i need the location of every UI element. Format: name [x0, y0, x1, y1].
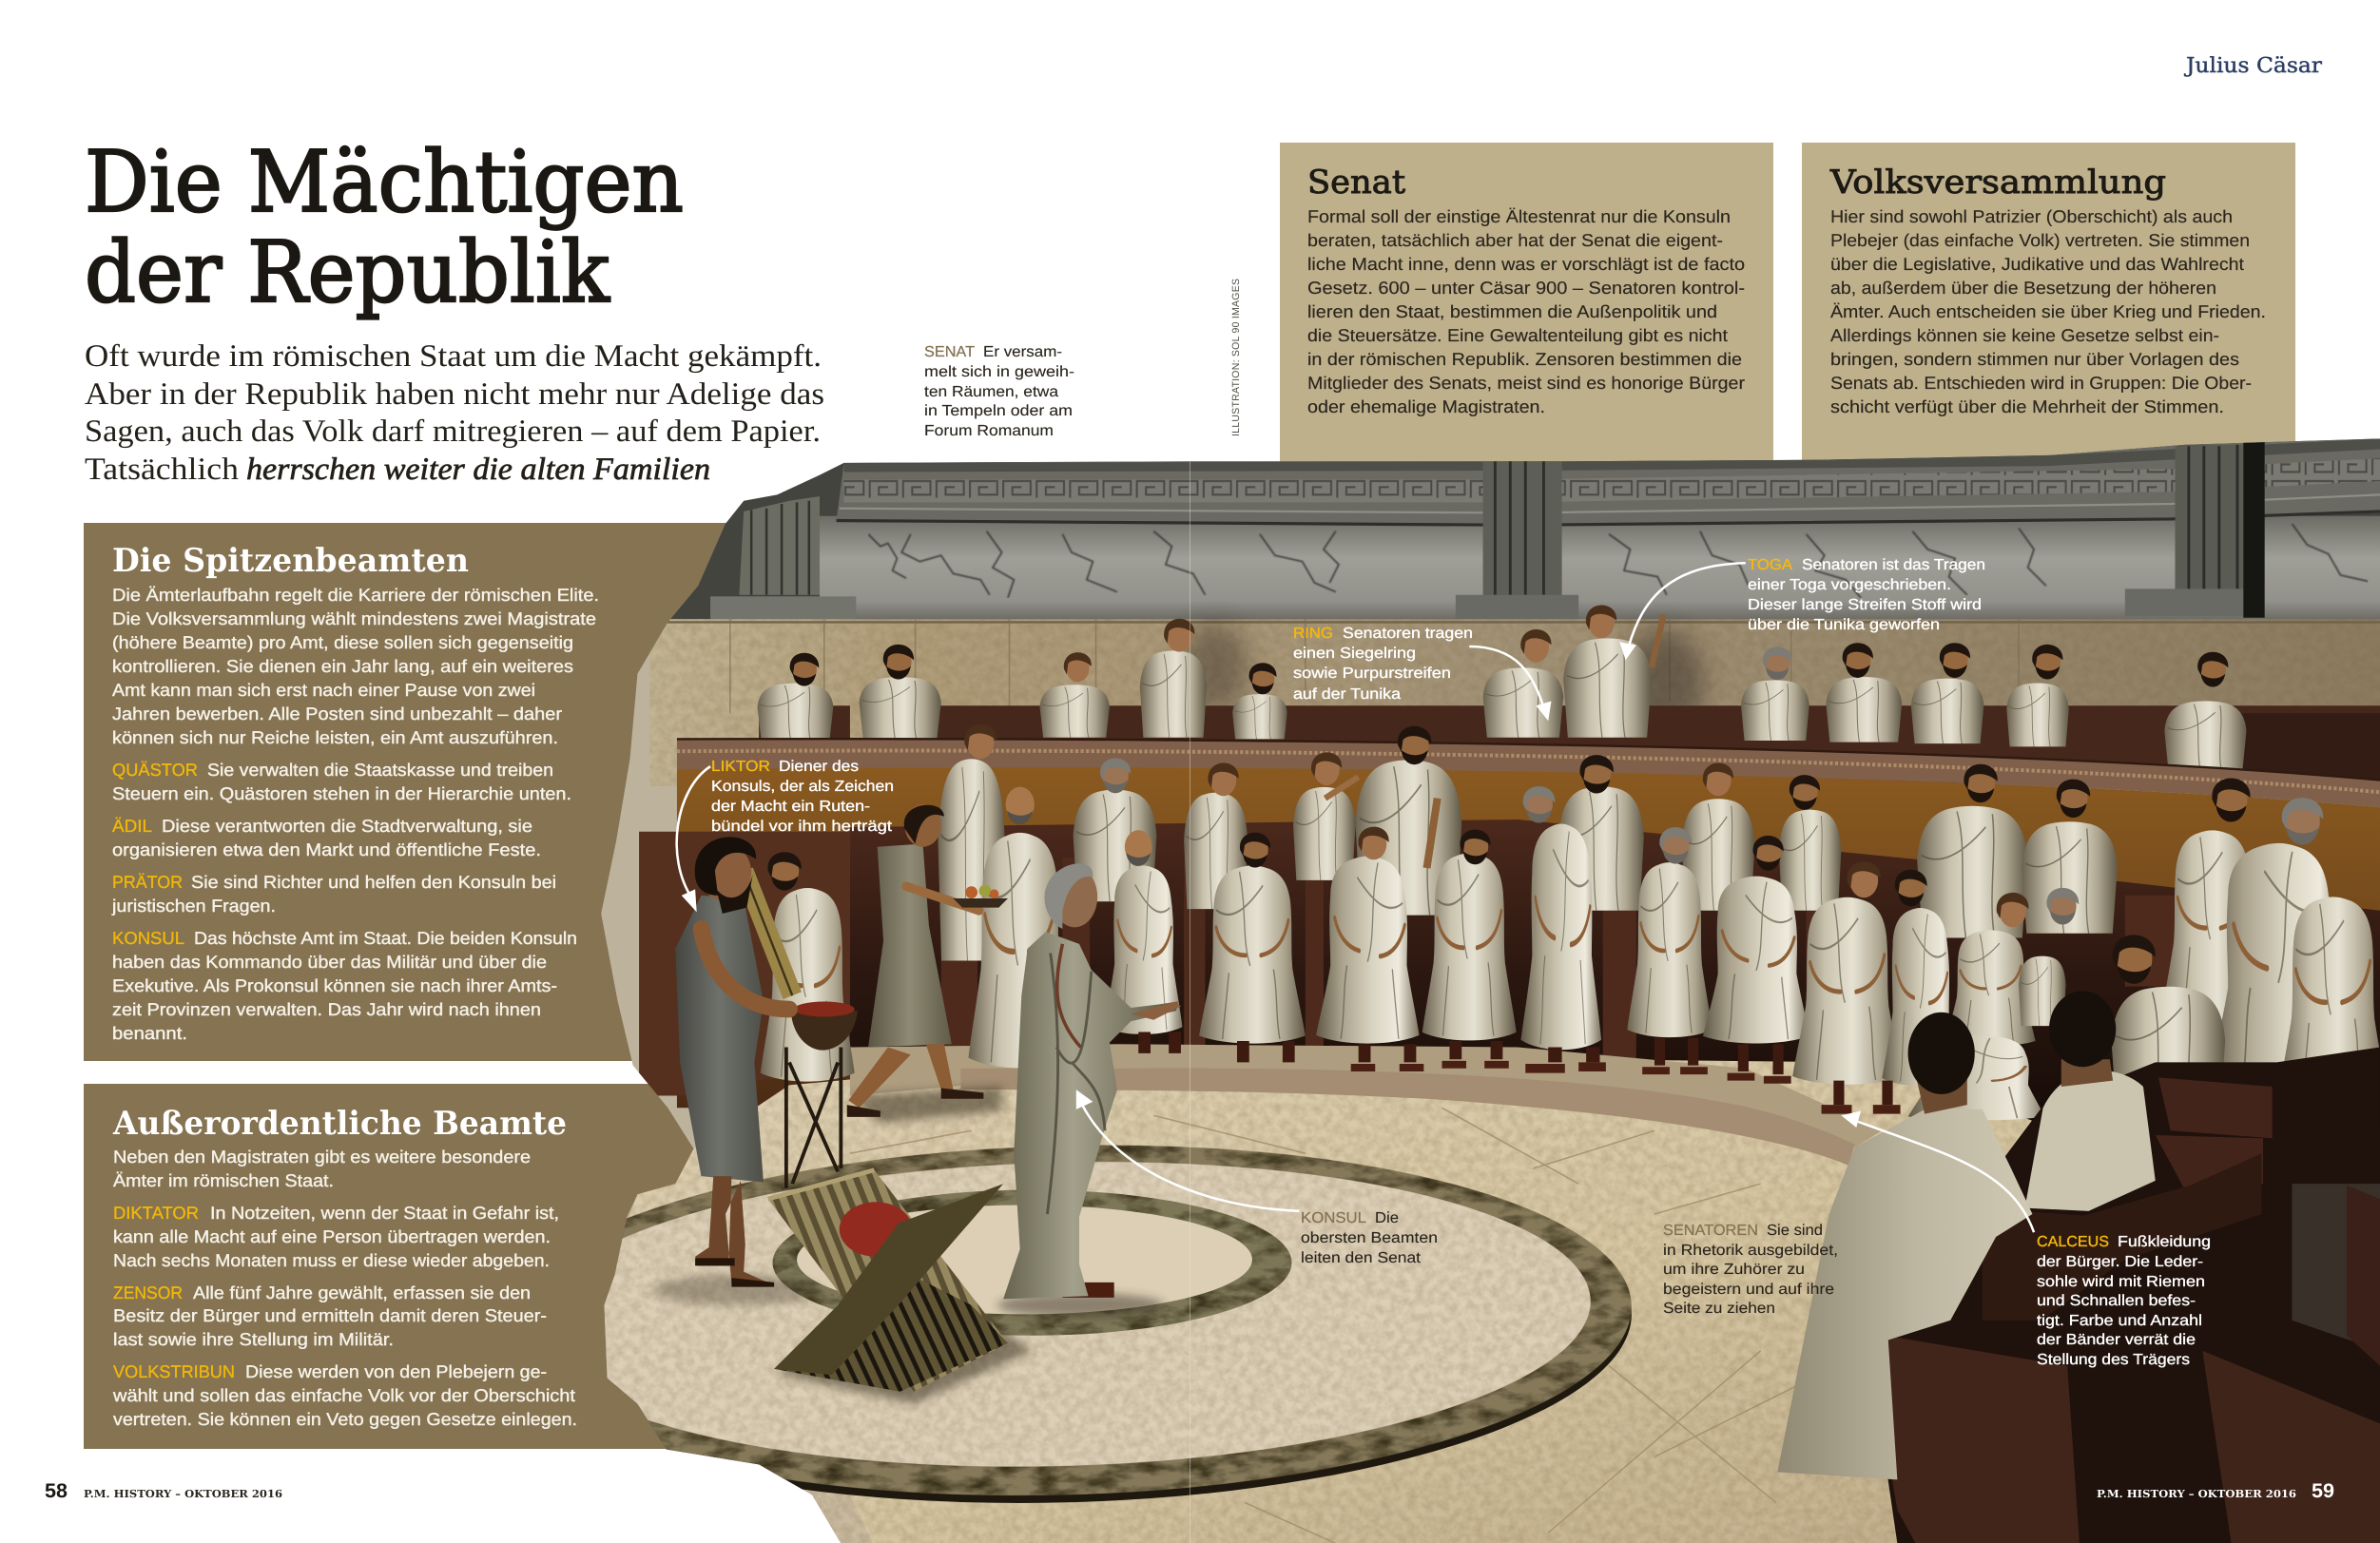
footer: right page: P.M. HISTORY – OKTOBER 2016 — [2097, 1488, 2296, 1500]
wall: stone lower wall — [649, 619, 2380, 786]
body: Senat: Mitglieder des Senats, meist sind es honorige Bürger — [1307, 373, 1745, 393]
body: Volksversammlung: Allerdings können sie keine Gesetze selbst ein- — [1830, 325, 2219, 345]
text block: Senat — [1307, 164, 1745, 416]
body: intro: Die Ämterlaufbahn regelt die Karriere der römischen Elite. — [112, 585, 599, 605]
heading: Volksversammlung: Volksversammlung — [1829, 164, 2166, 202]
body: Volksversammlung: Hier sind sowohl Patrizier (Oberschicht) als auch — [1830, 206, 2233, 226]
callout: Calceus — [2037, 1234, 2211, 1368]
note: Senat: ten Räumen, etwa — [924, 384, 1058, 400]
body: Volksversammlung: Plebejer (das einfache Volk) vertreten. Sie stimmen — [1830, 230, 2250, 250]
intro text — [85, 339, 824, 487]
callout: Calceus: der Bürger. Die Leder- — [2037, 1254, 2203, 1270]
illustration: Roman senate chamber scene — [489, 433, 2380, 1543]
entry: Prätor: PRÄTOR — [112, 872, 183, 892]
body: Senat: Gesetz. 600 – unter Cäsar 900 – Senatoren kontrol- — [1307, 278, 1745, 298]
panel: Senat background — [1280, 143, 1773, 485]
entry: Zensor — [113, 1283, 547, 1349]
callout: Konsul: KONSUL — [1301, 1210, 1366, 1226]
figure: consul addressing the senate — [997, 863, 1181, 1318]
callout: Senatoren: Seite zu ziehen — [1663, 1301, 1775, 1317]
entry: Quästor: QUÄSTOR — [112, 760, 198, 780]
figures: legs and boots of seated senators — [1138, 1032, 1901, 1114]
body: intro — [113, 1147, 531, 1190]
body: intro: Amt kann man sich erst nach einer Pause von zwei — [112, 680, 535, 700]
callout: Toga: Senatoren ist das Tragen — [1802, 557, 1985, 573]
note: Senat: Forum Romanum — [924, 423, 1054, 439]
image credit: ILLUSTRATION: SOL 90 IMAGES — [1230, 279, 1242, 436]
arrow: Toga — [1619, 563, 1746, 660]
callout: Toga: über die Tunika geworfen — [1748, 617, 1940, 633]
figure: lictor with fasces and brazier — [652, 837, 858, 1305]
callout: Konsul: obersten Beamten — [1301, 1230, 1438, 1246]
callout: Calceus: CALCEUS — [2037, 1234, 2109, 1250]
wall: marble upper wall — [820, 516, 2380, 622]
callout: Calceus: und Schnallen befes- — [2037, 1293, 2196, 1309]
body: intro: Die Volksversammlung wählt mindestens zwei Magistrate — [112, 608, 596, 628]
arrow: Liktor — [677, 766, 710, 912]
callout: Liktor: Diener des — [779, 759, 859, 775]
callout: Toga: Dieser lange Streifen Stoff wird — [1748, 597, 1982, 613]
entry: Ädil — [112, 816, 541, 859]
entry: Konsul: Das höchste Amt im Staat. Die beiden Konsuln — [194, 928, 577, 948]
footer: right page — [2097, 1480, 2334, 1502]
intro text: herrschen weiter die alten Familien — [246, 453, 710, 487]
body: Volksversammlung: Ämter. Auch entscheiden sie über Krieg und Frieden. — [1830, 301, 2266, 321]
furniture: foreground right benches — [1867, 1047, 2380, 1543]
body: intro — [112, 585, 599, 747]
entry: Konsul: benannt. — [112, 1023, 187, 1043]
title: der Republik — [85, 222, 610, 321]
entry: Konsul — [112, 928, 577, 1043]
body: Senat: oder ehemalige Magistraten. — [1307, 396, 1545, 416]
note: Senat — [924, 344, 1074, 439]
callout: Konsul — [1301, 1210, 1438, 1266]
callout: Liktor: LIKTOR — [711, 759, 770, 775]
body: Senat: Formal soll der einstige Ältestenrat nur die Konsuln — [1307, 206, 1731, 226]
callout: Liktor: bündel vor ihm herträgt — [711, 819, 893, 835]
callout: Konsul: Die — [1375, 1210, 1399, 1226]
arrow: Calceus — [1841, 1110, 2034, 1232]
entry: Konsul: zeit Provinzen verwalten. Das Jahr wird nach ihnen — [112, 999, 541, 1019]
entry: Diktator: DIKTATOR — [113, 1203, 199, 1223]
callout: Ring: Senatoren tragen — [1343, 626, 1473, 642]
entry: Volkstribun: Diese werden von den Plebejern ge- — [245, 1361, 547, 1381]
intro text: Oft wurde im römischen Staat um die Macht gekämpft. — [85, 339, 822, 374]
figure: attendant with tray — [847, 804, 1008, 1117]
text block: Außerordentliche Beamte — [112, 1105, 577, 1429]
entry: Konsul: KONSUL — [112, 928, 184, 948]
entry: Prätor: Sie sind Richter und helfen den Konsuln bei — [191, 872, 556, 892]
footer: right page: 59 — [2312, 1480, 2334, 1502]
entry: Ädil: Diese verantworten die Stadtverwaltung, sie — [162, 816, 532, 836]
entry: Diktator: In Notzeiten, wenn der Staat in Gefahr ist, — [210, 1203, 559, 1223]
callout: Liktor: Konsuls, der als Zeichen — [711, 779, 894, 795]
body: intro: Jahren bewerben. Alle Posten sind unbezahlt – daher — [112, 704, 562, 723]
body: Volksversammlung: über die Legislative, Judikative und das Wahlrecht — [1830, 254, 2244, 274]
callout: Ring — [1293, 626, 1473, 703]
entry: Ädil: ÄDIL — [112, 816, 152, 836]
intro text: Tatsächlich — [85, 453, 240, 487]
note: Senat: in Tempeln oder am — [924, 403, 1073, 419]
callout: Senatoren: um ihre Zuhörer zu — [1663, 1262, 1805, 1278]
callout: Senatoren: SENATOREN — [1663, 1223, 1758, 1239]
entry: Diktator — [113, 1203, 559, 1270]
body: Volksversammlung: ab, außerdem über die Besetzung der höheren — [1830, 278, 2216, 298]
callout: Ring: sowie Purpurstreifen — [1293, 665, 1451, 682]
heading: Senat: Senat — [1307, 164, 1405, 202]
entry: Volkstribun: wählt und sollen das einfache Volk vor der Oberschicht — [112, 1385, 575, 1405]
furniture: lower benches — [639, 820, 2380, 1130]
callout: Toga: TOGA — [1748, 557, 1792, 573]
body: intro: kontrollieren. Sie dienen ein Jahr lang, auf ein weiteres — [112, 656, 573, 676]
intro text: Aber in der Republik haben nicht mehr nur Adelige das — [85, 377, 824, 412]
body: Senat — [1307, 206, 1745, 416]
body: intro: können sich nur Reiche leisten, ein Amt auszuführen. — [112, 727, 558, 747]
callout: Toga: einer Toga vorgeschrieben. — [1748, 577, 1951, 593]
floor: paved floor and step — [604, 1044, 2125, 1543]
figures: seated front row senators — [761, 786, 2225, 1121]
furniture: curule chair with red cushion — [768, 1170, 1032, 1404]
entry: Konsul: Exekutive. Als Prokonsul können sie nach ihrer Amts- — [112, 975, 557, 995]
arrow: Ring — [1469, 646, 1551, 721]
floor: side of cut-away floor — [803, 1489, 873, 1543]
callout: Liktor — [711, 759, 894, 835]
floor: outer stone ring — [605, 1145, 1632, 1503]
entry: Quästor: Sie verwalten die Staatskasse und treiben — [207, 760, 553, 780]
wall: columns — [710, 442, 2265, 619]
callout: Ring: einen Siegelring — [1293, 646, 1416, 662]
callout: Ring: RING — [1293, 626, 1333, 642]
entry: Zensor: last sowie ihre Stellung im Militär. — [113, 1329, 394, 1349]
body: Volksversammlung: bringen, sondern stimmen nur über Vorlagen des — [1830, 349, 2239, 369]
panel: Die Spitzenbeamten background — [84, 523, 768, 1061]
text block: Die Spitzenbeamten — [111, 542, 599, 1043]
entry: Diktator: Nach sechs Monaten muss er diese wieder abgeben. — [113, 1250, 550, 1270]
body: Volksversammlung — [1830, 206, 2266, 416]
footer: left page — [45, 1480, 282, 1502]
entry: Zensor: Besitz der Bürger und ermitteln damit deren Steuer- — [113, 1305, 547, 1325]
footer: left page: 58 — [45, 1480, 68, 1502]
body: Senat: lieren den Staat, bestimmen die Außenpolitik und — [1307, 301, 1717, 321]
callout: Toga — [1748, 557, 1985, 633]
entry: Volkstribun: vertreten. Sie können ein Veto gegen Gesetze einlegen. — [113, 1409, 577, 1429]
panel: Volksversammlung background — [1802, 143, 2295, 485]
body: Volksversammlung: schicht verfügt über die Mehrheit der Stimmen. — [1830, 396, 2224, 416]
body: Volksversammlung: Senats ab. Entschieden wird in Gruppen: Die Ober- — [1830, 373, 2252, 393]
entry: Zensor: ZENSOR — [113, 1283, 183, 1302]
note: Senat: melt sich in geweih- — [924, 364, 1074, 380]
entry: Volkstribun: VOLKSTRIBUN — [113, 1361, 235, 1381]
callout: Liktor: der Macht ein Ruten- — [711, 799, 870, 815]
footer: left page: P.M. HISTORY – OKTOBER 2016 — [84, 1488, 282, 1500]
text block: Volksversammlung — [1829, 164, 2266, 416]
heading: Die Spitzenbeamten: Die Spitzenbeamten — [112, 542, 469, 580]
wall: frieze with meander — [837, 438, 2380, 525]
panel: Außerordentliche Beamte background — [84, 1084, 730, 1449]
arrows: white callout leaders — [677, 563, 2034, 1232]
callout: Calceus: Stellung des Trägers — [2037, 1352, 2190, 1368]
callout: Senatoren — [1663, 1223, 1838, 1317]
entry: Zensor: Alle fünf Jahre gewählt, erfassen sie den — [193, 1283, 531, 1302]
floor: inner stone ring — [773, 1189, 1291, 1336]
arrow: Konsul — [1076, 1090, 1299, 1211]
entry: Volkstribun — [112, 1361, 577, 1429]
figure: foreground senator seen from behind — [1777, 1013, 2032, 1479]
figures: lower back row senators — [938, 724, 2380, 1106]
body: intro: (höhere Beamte) pro Amt, diese sollen sich gegenseitig — [112, 632, 573, 652]
callout: Senatoren: begeistern und auf ihre — [1663, 1282, 1834, 1298]
title — [85, 132, 684, 321]
callout: Senatoren: Sie sind — [1767, 1223, 1823, 1239]
intro text: Sagen, auch das Volk darf mitregieren – auf dem Papier. — [85, 415, 821, 449]
callout: Calceus: Fußkleidung — [2118, 1234, 2211, 1250]
entry: Quästor — [112, 760, 571, 803]
entry: Prätor: juristischen Fragen. — [111, 896, 276, 916]
body: Senat: liche Macht inne, denn was er vorschlägt ist de facto — [1307, 254, 1745, 274]
body: Senat: beraten, tatsächlich aber hat der Senat die eigent- — [1307, 230, 1723, 250]
body: Senat: in der römischen Republik. Zensoren bestimmen die — [1307, 349, 1742, 369]
callout: Calceus: der Bänder verrät die — [2037, 1332, 2196, 1348]
wall: curved wood parapet and amber wall — [677, 739, 2380, 1108]
note: Senat: Er versam- — [983, 344, 1062, 360]
body: intro: Neben den Magistraten gibt es weitere besondere — [113, 1147, 531, 1167]
title: Die Mächtigen — [85, 132, 684, 231]
figure: senator seen from behind, second — [2024, 991, 2156, 1211]
entry: Quästor: Steuern ein. Quästoren stehen in der Hierarchie unten. — [112, 783, 571, 803]
callout: Konsul: leiten den Senat — [1301, 1250, 1422, 1266]
callout: Calceus: sohle wird mit Riemen — [2037, 1274, 2205, 1290]
figures: upper row senators — [758, 606, 2247, 773]
callout: Calceus: tigt. Farbe und Anzahl — [2037, 1313, 2202, 1329]
callout: Senatoren: in Rhetorik ausgebildet, — [1663, 1243, 1838, 1259]
note: Senat: SENAT — [924, 344, 975, 360]
entry: Konsul: haben das Kommando über das Militär und über die — [112, 952, 547, 972]
body: intro: Ämter im römischen Staat. — [113, 1170, 334, 1190]
running head: Julius Cäsar — [2184, 54, 2323, 78]
entry: Prätor — [111, 872, 556, 916]
body: Senat: die Steuersätze. Eine Gewaltenteilung gibt es nicht — [1307, 325, 1728, 345]
heading: Außerordentliche Beamte: Außerordentliche Beamte — [112, 1105, 567, 1143]
entry: Diktator: kann alle Macht auf eine Person übertragen werden. — [113, 1226, 551, 1246]
callout: Ring: auf der Tunika — [1293, 686, 1401, 703]
entry: Ädil: organisieren etwa den Markt und öffentliche Feste. — [112, 839, 541, 859]
